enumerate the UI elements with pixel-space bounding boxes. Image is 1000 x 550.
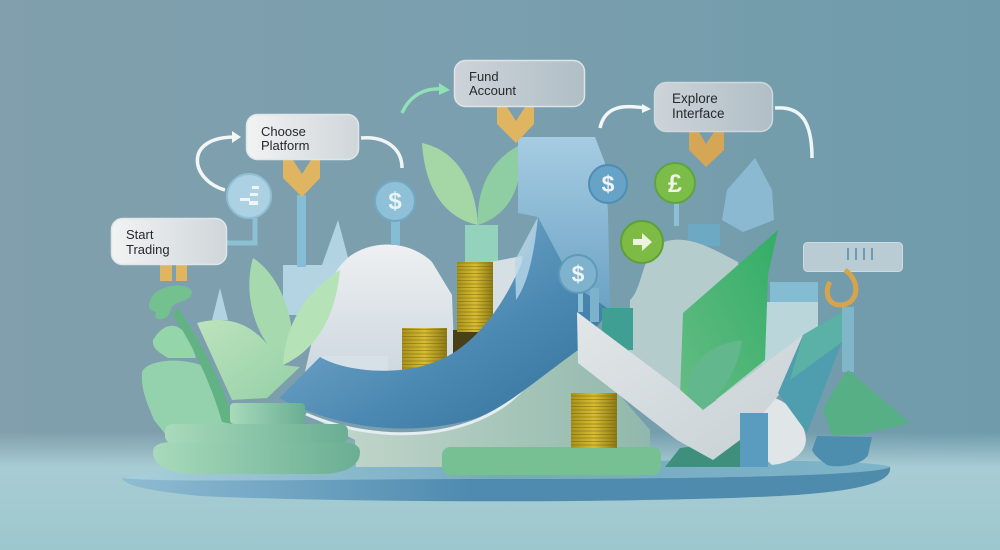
white chevron — [577, 312, 803, 460]
white curve edge — [306, 347, 578, 434]
icon: arrow coin — [621, 221, 663, 263]
label: Explore Interface: Explore — [672, 91, 718, 106]
arrow: start to choose — [197, 131, 241, 190]
gold ring icon — [827, 270, 856, 305]
arrow: to explore interface — [600, 104, 651, 128]
label: Start Trading: Start — [126, 227, 154, 242]
green fan plant — [823, 370, 910, 435]
label: Explore Interface: Interface — [672, 106, 725, 121]
icon: dollar coin — [375, 181, 415, 221]
label: Choose Platform: Choose — [261, 124, 306, 139]
white hill — [300, 245, 455, 395]
panel: fund account plant — [422, 143, 521, 265]
stacked pads — [153, 403, 360, 474]
arrow: choose onward — [361, 138, 402, 168]
label: Choose Platform: Platform — [261, 138, 309, 153]
label: Start Trading: Trading — [126, 242, 170, 257]
yellow connectors — [160, 107, 724, 281]
front pad — [442, 447, 661, 475]
icon: pound coin: £ — [668, 170, 682, 198]
crystal — [722, 158, 774, 232]
label: Explore Interface — [654, 82, 772, 132]
background shapes: pale boxes and triangles — [212, 220, 854, 372]
teal folded shape — [778, 312, 842, 433]
translucent facet on swoosh — [515, 217, 538, 300]
teal block — [602, 308, 633, 350]
arrow: explore onward — [775, 108, 812, 158]
platform base — [122, 461, 890, 501]
icon: dollar coin on panel: $ — [602, 171, 615, 197]
label: Start Trading — [112, 218, 226, 264]
label: Fund Account: Account — [469, 83, 516, 98]
icon: dollar coin on panel — [589, 165, 627, 203]
tall blue panel — [518, 137, 610, 352]
white blob behind chevron — [745, 397, 806, 465]
label: Fund Account — [454, 60, 584, 106]
icon: dollar coin: $ — [388, 188, 402, 215]
icon: lower dollar coin: $ — [572, 261, 585, 287]
blue pot — [812, 436, 872, 466]
grey hill — [628, 240, 770, 400]
blue column — [740, 413, 768, 467]
big green leaf — [680, 230, 778, 410]
lower pale curve band — [306, 347, 650, 467]
label: Fund Account: Fund — [469, 69, 499, 84]
icon: pound coin — [655, 163, 695, 203]
front coins — [571, 393, 617, 448]
small white block — [322, 356, 388, 372]
arrow: to fund account — [402, 83, 450, 113]
dark green shape under chevron — [665, 440, 740, 467]
small blank label with bars — [804, 242, 902, 272]
blue swoosh curve — [279, 217, 610, 429]
label: Choose Platform — [246, 114, 358, 160]
coin stacks behind the curve — [402, 262, 493, 370]
panel: left plant — [142, 258, 340, 440]
icon: lower dollar coin — [559, 255, 597, 293]
icon: pale chart coin — [227, 174, 271, 218]
connector stems — [227, 195, 679, 322]
white piece right of coins — [490, 256, 522, 345]
